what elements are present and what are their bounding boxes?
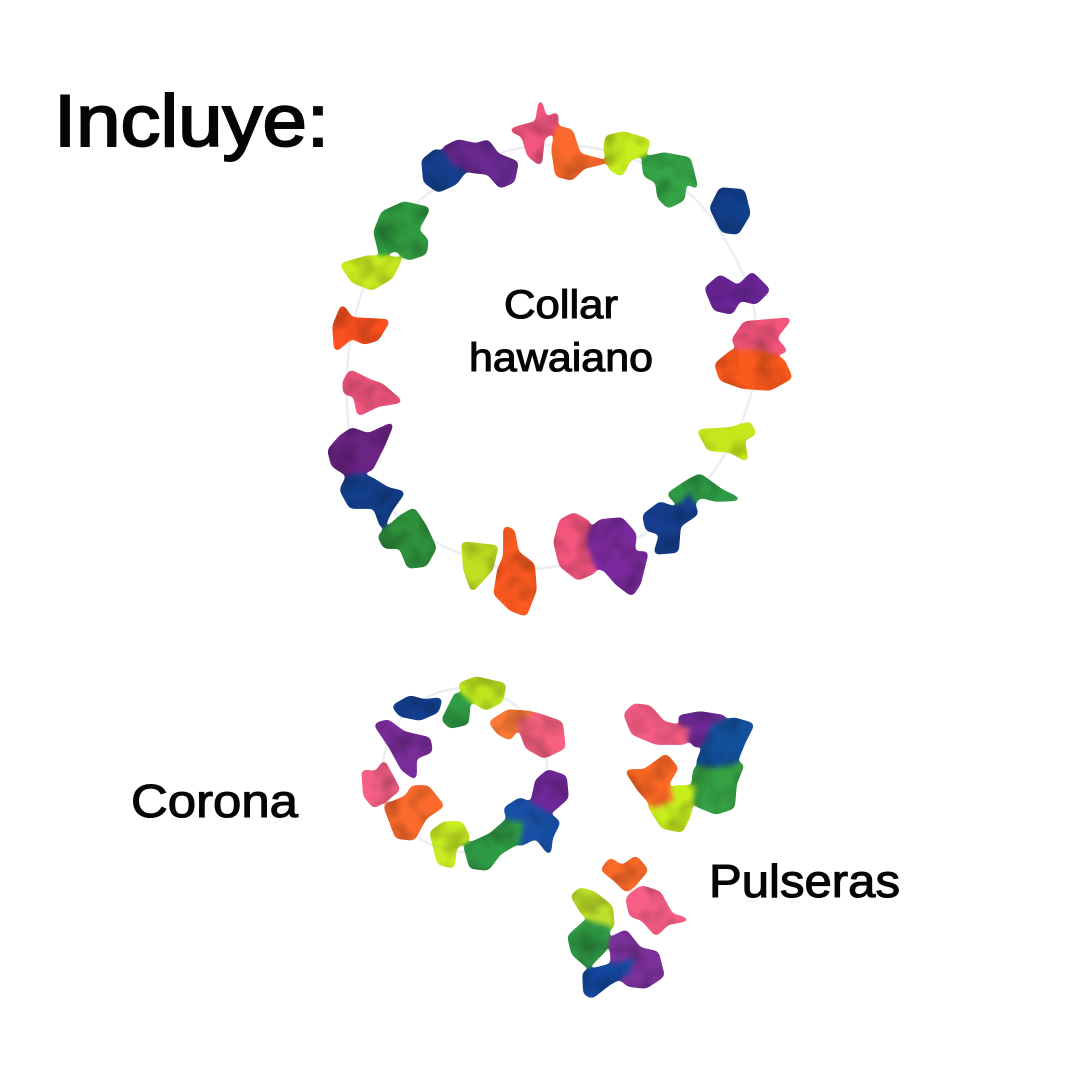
flower: pink crown left [362,760,400,808]
flower: green right [667,474,743,506]
crown label: Corona [131,775,298,827]
flower: pink right [732,318,792,356]
flower: orange bottom [494,526,536,616]
flower: navy bracelet [696,718,754,768]
flower: navy bracelet 2 [583,958,636,998]
flower: pink left [343,370,403,416]
flower: green crown bottom [464,820,524,870]
flower: navy lower left [340,470,405,530]
flower: orange crown left [384,786,444,840]
bracelet: bottom [568,856,692,998]
flower: purple left [328,422,394,476]
flower: pink bracelet 2 [626,886,692,936]
title: Incluye: [54,81,329,162]
bracelets label: Pulseras [709,855,900,907]
flower: yellow right [697,422,756,462]
flower: green top right [642,153,698,208]
flower: navy right [710,188,750,234]
crown: corona [362,677,568,870]
flower: navy crown [392,696,442,720]
flower: pink bracelet [624,704,690,744]
flower: orange crown [489,710,534,740]
flower: orange top [552,126,610,180]
flower: yellow bracelet 2 [571,888,614,928]
flower: green crown [442,692,470,728]
flower: yellow left [340,256,402,290]
flower: orange left [333,304,390,352]
flower: purple crown [374,720,432,780]
flower: green lower left [378,508,436,568]
necklace: collar hawaiano [328,96,792,616]
flower: orange right [715,350,792,390]
flower: purple crown right [530,770,568,812]
necklace label: Collar [504,283,618,327]
flower: navy crown right [504,798,560,856]
flower: green bracelet [692,760,744,814]
flower: pink crown [516,713,565,758]
flower: green left [374,202,430,260]
necklace label [469,283,653,380]
flower: green bracelet 2 [568,920,610,968]
flower: purple bracelet 2 [610,930,664,988]
necklace label: hawaiano [469,336,653,380]
flower: navy lower right [643,492,698,554]
flower: purple bracelet [678,712,726,748]
flower: purple top left [442,140,518,188]
flower: pink bottom [554,513,596,580]
flower: purple right [705,272,770,314]
flower: yellow bracelet [648,786,696,832]
flower: purple bottom [582,518,648,596]
flower: navy top left [422,149,468,192]
flower: pink top [508,96,558,166]
flower: yellow top [604,132,650,176]
bracelet: top right [624,704,754,832]
flower: orange bracelet [625,754,678,808]
flower: yellow crown [458,677,506,710]
flower: orange bracelet 2 [601,856,648,892]
flower: yellow crown bottom [430,822,470,868]
flower: yellow bottom [462,542,498,592]
